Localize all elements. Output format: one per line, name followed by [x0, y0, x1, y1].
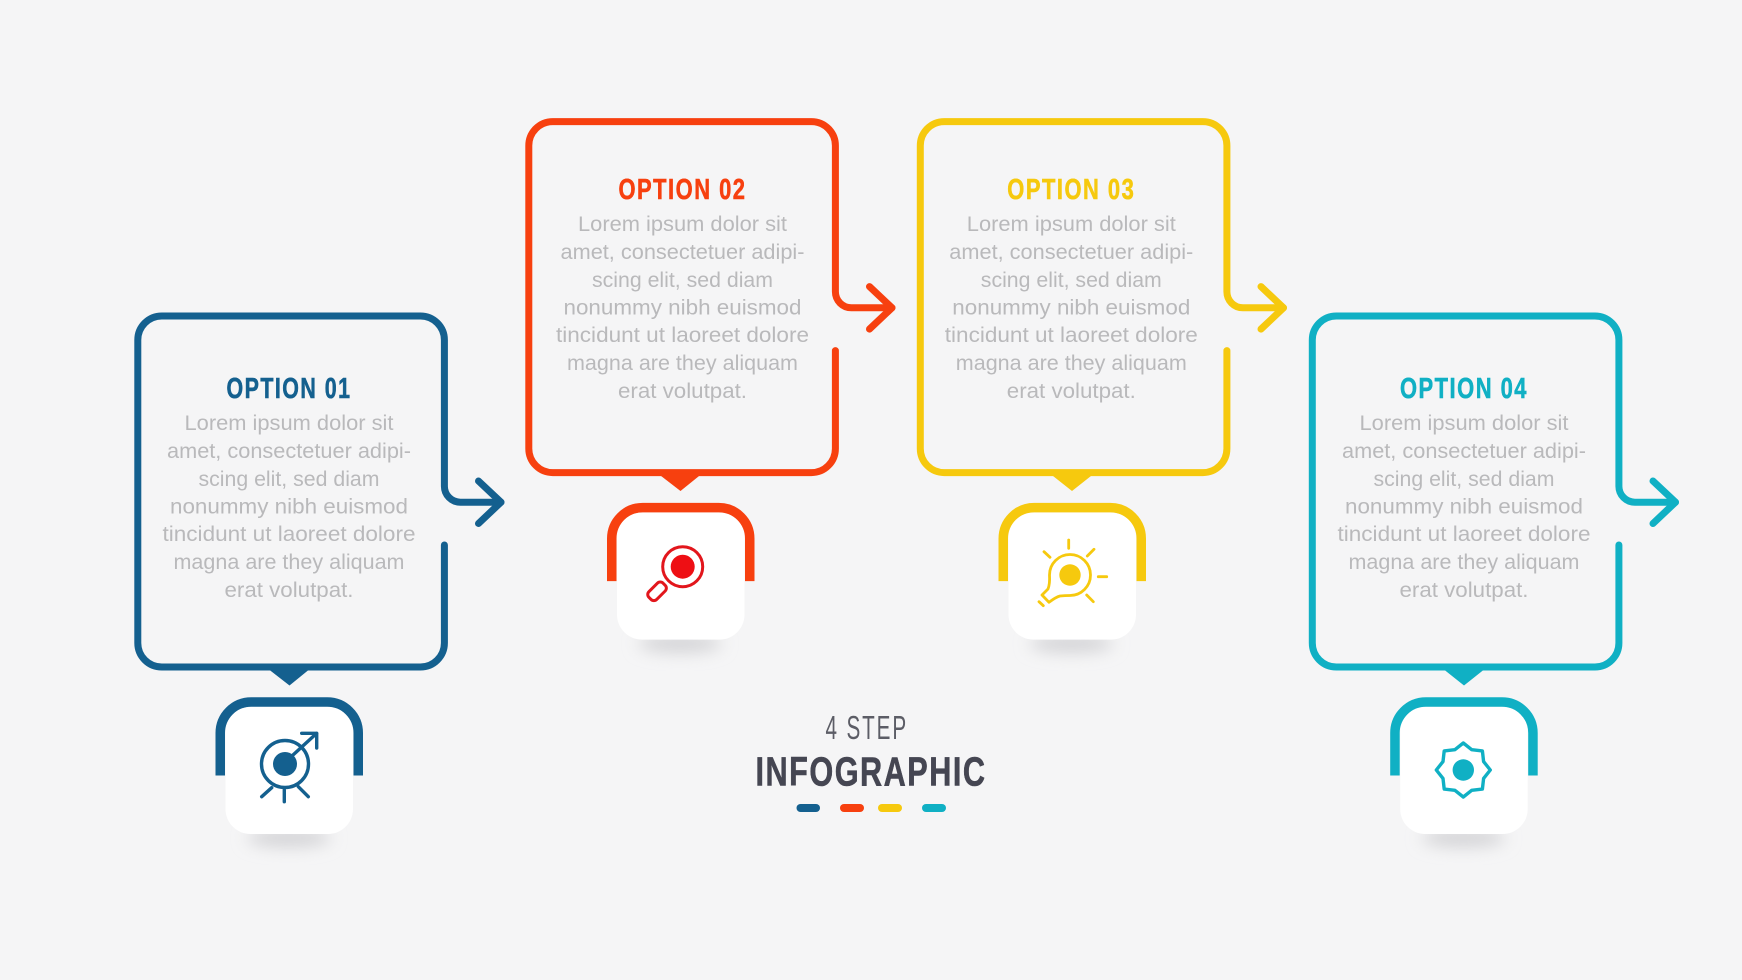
body text: option 02 [556, 212, 809, 403]
body text: option 04: Lorem ipsum dolor sit [1360, 411, 1569, 435]
pointer: option 04 [1442, 668, 1486, 686]
body text: option 01: amet, consectetuer adipi- [167, 439, 411, 463]
icon tile: option 02 [612, 508, 750, 653]
panel: option 01 [138, 316, 501, 847]
frame and arrow: option 03 [920, 122, 1284, 473]
title: infographic: INFOGRAPHIC [756, 748, 986, 794]
body text: option 02: erat volutpat. [618, 379, 747, 403]
heading: option 04: OPTION 04 [1400, 373, 1528, 405]
icon: light bulb [1039, 540, 1107, 606]
frame and arrow: option 04 [1312, 316, 1676, 667]
body text: option 03: tincidunt ut laoreet dolore [945, 323, 1198, 347]
body text: option 03: erat volutpat. [1007, 379, 1136, 403]
heading: option 02: OPTION 02 [618, 174, 746, 206]
panel: option 02 [529, 122, 892, 653]
body text: option 01: magna are they aliquam [174, 550, 404, 574]
body text: option 03: magna are they aliquam [956, 351, 1187, 375]
body text: option 01: erat volutpat. [224, 578, 354, 602]
panel: option 04 [1312, 316, 1676, 847]
icon: target with arrow [262, 733, 317, 802]
icon: magnifier [646, 547, 703, 602]
panel: option 03 [920, 122, 1284, 653]
pointer: option 03 [1050, 474, 1094, 491]
body text: option 01 [162, 411, 416, 602]
body text: option 02: Lorem ipsum dolor sit [578, 212, 787, 236]
title block [756, 709, 986, 812]
icon tile: option 03 [1003, 508, 1141, 653]
heading: option 01: OPTION 01 [226, 373, 352, 405]
body text: option 02: amet, consectetuer adipi- [560, 240, 804, 264]
icon tile: option 04 [1395, 702, 1533, 847]
body text: option 01: Lorem ipsum dolor sit [184, 411, 394, 435]
body text: option 02: magna are they aliquam [567, 351, 798, 375]
body text: option 03: Lorem ipsum dolor sit [967, 212, 1176, 236]
body text: option 02: tincidunt ut laoreet dolore [556, 323, 809, 347]
pointer: option 02 [658, 474, 702, 491]
body text: option 03: scing elit, sed diam [981, 268, 1162, 292]
body text: option 02: scing elit, sed diam [592, 268, 773, 292]
title: 4 step: 4 STEP [826, 709, 908, 746]
body text: option 03: amet, consectetuer adipi- [949, 240, 1193, 264]
body text: option 03 [945, 212, 1198, 403]
body text: option 02: nonummy nibh euismod [564, 296, 802, 320]
body text: option 04: nonummy nibh euismod [1345, 494, 1583, 518]
body text: option 01: nonummy nibh euismod [170, 494, 408, 518]
icon tile: option 01 [220, 702, 358, 847]
heading: option 03: OPTION 03 [1007, 174, 1135, 206]
body text: option 04: erat volutpat. [1400, 578, 1528, 602]
icon: gear [1436, 743, 1490, 797]
body text: option 01: tincidunt ut laoreet dolore [162, 522, 416, 546]
body text: option 04 [1338, 411, 1590, 602]
body text: option 04: tincidunt ut laoreet dolore [1338, 522, 1590, 546]
body text: option 04: magna are they aliquam [1348, 550, 1580, 574]
colour key dashes [796, 804, 946, 812]
body text: option 04: amet, consectetuer adipi- [1342, 439, 1586, 463]
pointer: option 01 [267, 668, 311, 686]
body text: option 03: nonummy nibh euismod [952, 296, 1190, 320]
body text: option 01: scing elit, sed diam [198, 467, 380, 491]
body text: option 04: scing elit, sed diam [1374, 467, 1554, 491]
frame and arrow: option 01 [138, 316, 501, 667]
frame and arrow: option 02 [529, 122, 892, 473]
